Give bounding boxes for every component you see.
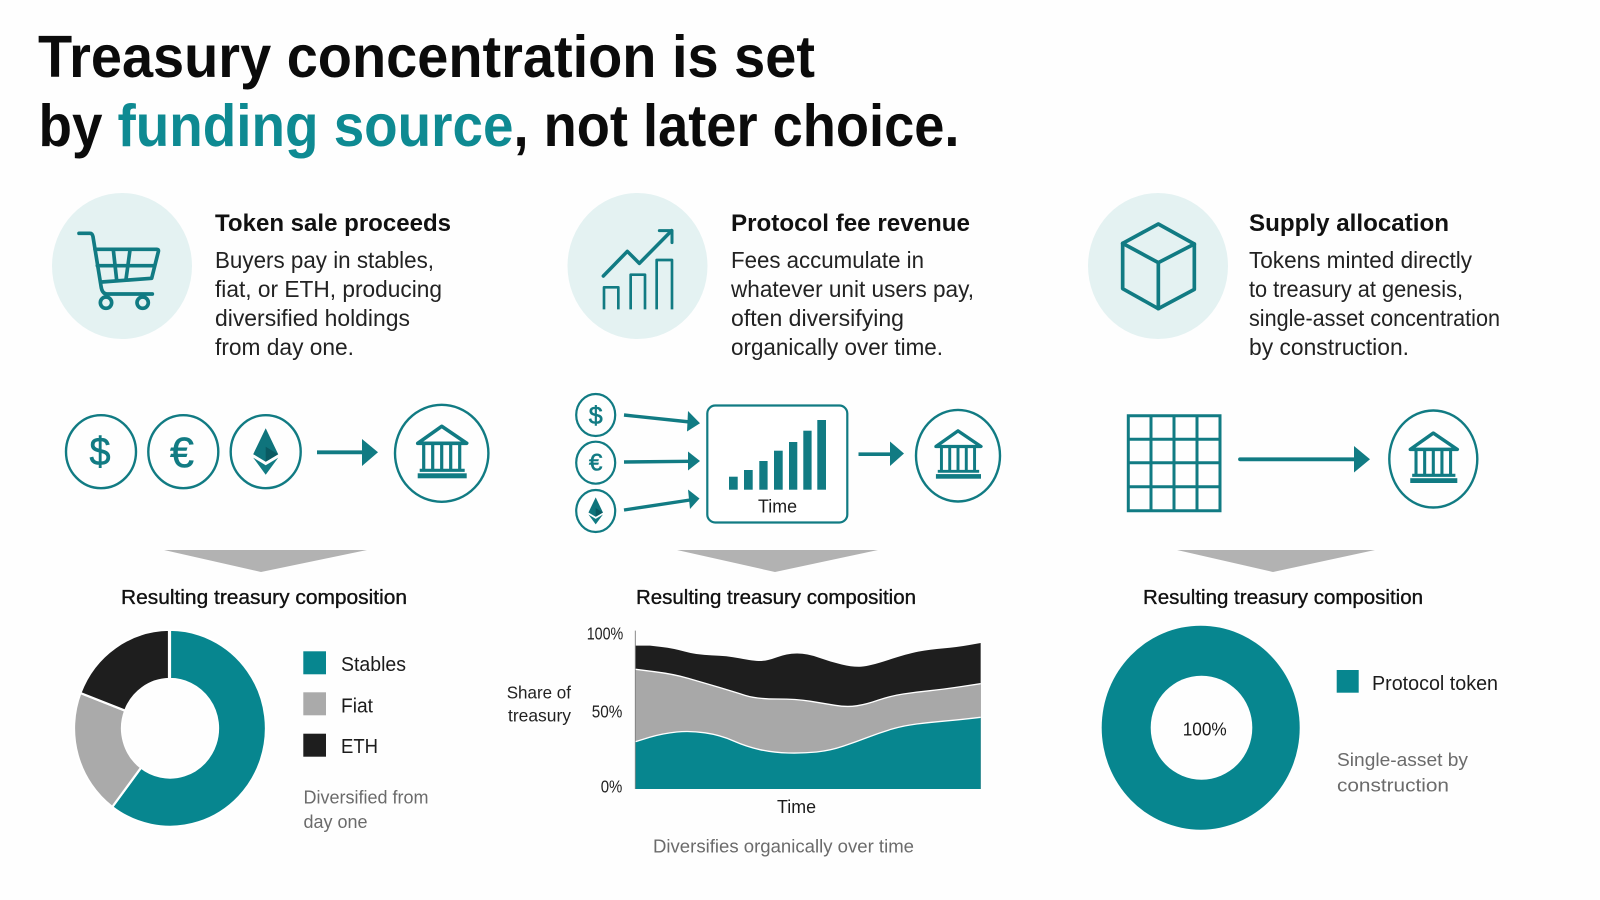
box: accumulation over time: Time (758, 496, 797, 517)
flow: token grid to treasury (1128, 410, 1477, 511)
text block: supply allocation description: to treasury at genesis, (1249, 276, 1463, 302)
chart: stacked area over time (507, 623, 981, 817)
axis labels: 0% (601, 776, 622, 796)
arrow: box to treasury (858, 442, 904, 466)
axis labels: Share of (507, 682, 571, 702)
chart: diversified donut (74, 630, 266, 827)
title: , not later choice. (514, 93, 960, 159)
text block: supply allocation description: by construction. (1249, 334, 1409, 360)
box: accumulation over time (707, 406, 847, 522)
axis labels: 100% (587, 623, 623, 643)
icon: small dollar (576, 394, 615, 436)
panel: supply allocation (1088, 193, 1500, 830)
arrow: dollar to box (624, 411, 700, 432)
icon: token grid (1128, 416, 1220, 511)
axis labels: treasury (508, 706, 571, 726)
icon: small euro: € (589, 450, 603, 477)
arrow: down to composition (677, 550, 878, 572)
text block: fee revenue description: Fees accumulate in (731, 247, 924, 273)
panel: protocol fee revenue (507, 193, 1000, 856)
stacked areas (635, 631, 981, 789)
arrow head (1354, 446, 1370, 472)
chart: single-asset donut (1102, 626, 1300, 830)
text block: fee revenue description: whatever unit users pay, (730, 276, 974, 302)
legend: stables, fiat, ETH: ETH (341, 736, 378, 758)
title: by (38, 93, 103, 159)
note: single-asset by construction (1337, 749, 1469, 796)
title: Treasury concentration is set (38, 24, 815, 90)
heading: resulting composition: Resulting treasury composition (1143, 587, 1423, 609)
chart: single-asset donut: 100% (1183, 720, 1227, 740)
heading: token sale proceeds: Token sale proceeds (215, 210, 451, 237)
legend: protocol token: Protocol token (1372, 673, 1498, 695)
note: single-asset by construction: construction (1337, 775, 1449, 796)
legend: stables, fiat, ETH: Stables (341, 654, 406, 676)
text block: supply allocation description: Tokens minted directly (1249, 247, 1473, 273)
note: diversified from day one: day one (304, 811, 368, 832)
title: funding source (118, 93, 514, 159)
arrow (317, 439, 378, 466)
flow: fees accumulate into treasury (576, 394, 1000, 532)
icon: ether (231, 415, 301, 488)
text block: token sale description: from day one. (215, 334, 354, 360)
text block: token sale description: Buyers pay in stables, (215, 247, 434, 273)
icon: treasury bank (395, 405, 488, 502)
axis labels (507, 623, 816, 817)
arrow: ether to box (624, 490, 700, 510)
text block: token sale description: diversified holdings (215, 305, 410, 331)
axis labels: 50% (592, 701, 622, 721)
icon: dollar: $ (90, 430, 110, 474)
text block: fee revenue description: organically over time. (731, 334, 943, 360)
axis labels: Time (777, 796, 816, 817)
arrow: euro to box (624, 452, 700, 470)
icon: cube (1088, 193, 1228, 339)
note: single-asset by construction: Single-asset by (1337, 749, 1469, 770)
panel: token sale proceeds (52, 193, 488, 832)
heading: resulting composition: Resulting treasury composition (121, 587, 407, 609)
icon: small euro (576, 442, 615, 484)
icon: treasury bank (1389, 410, 1477, 508)
icon: euro (148, 415, 218, 488)
text block: token sale description (215, 247, 442, 360)
icon: shopping cart (52, 193, 192, 339)
icon: dollar (66, 415, 136, 488)
text block: fee revenue description (730, 247, 974, 360)
heading: protocol fee revenue: Protocol fee revenue (731, 210, 970, 237)
title (38, 24, 960, 159)
text block: supply allocation description (1249, 247, 1500, 360)
note: diversifies organically: Diversifies organically over time (653, 835, 914, 856)
text block: supply allocation description: single-asset concentration (1249, 305, 1500, 331)
heading: resulting composition: Resulting treasury composition (636, 587, 916, 609)
icon: small dollar: $ (589, 402, 603, 430)
text block: fee revenue description: often diversifying (731, 305, 904, 331)
legend: protocol token (1337, 670, 1498, 695)
heading: supply allocation: Supply allocation (1249, 210, 1449, 237)
legend: stables, fiat, ETH: Fiat (341, 696, 373, 718)
note: diversified from day one (304, 786, 428, 832)
flow: currencies into treasury (66, 405, 488, 502)
note: diversified from day one: Diversified from (304, 786, 428, 807)
icon: small ether (576, 490, 615, 532)
arrow: down to composition (164, 550, 367, 572)
arrow: grid to treasury (1240, 457, 1355, 461)
icon: growth chart (568, 193, 708, 339)
text block: token sale description: fiat, or ETH, producing (215, 276, 442, 302)
icon: treasury bank (916, 410, 1000, 502)
arrow: down to composition (1177, 550, 1375, 572)
legend: stables, fiat, ETH (303, 651, 406, 758)
icon: euro: € (170, 429, 194, 477)
